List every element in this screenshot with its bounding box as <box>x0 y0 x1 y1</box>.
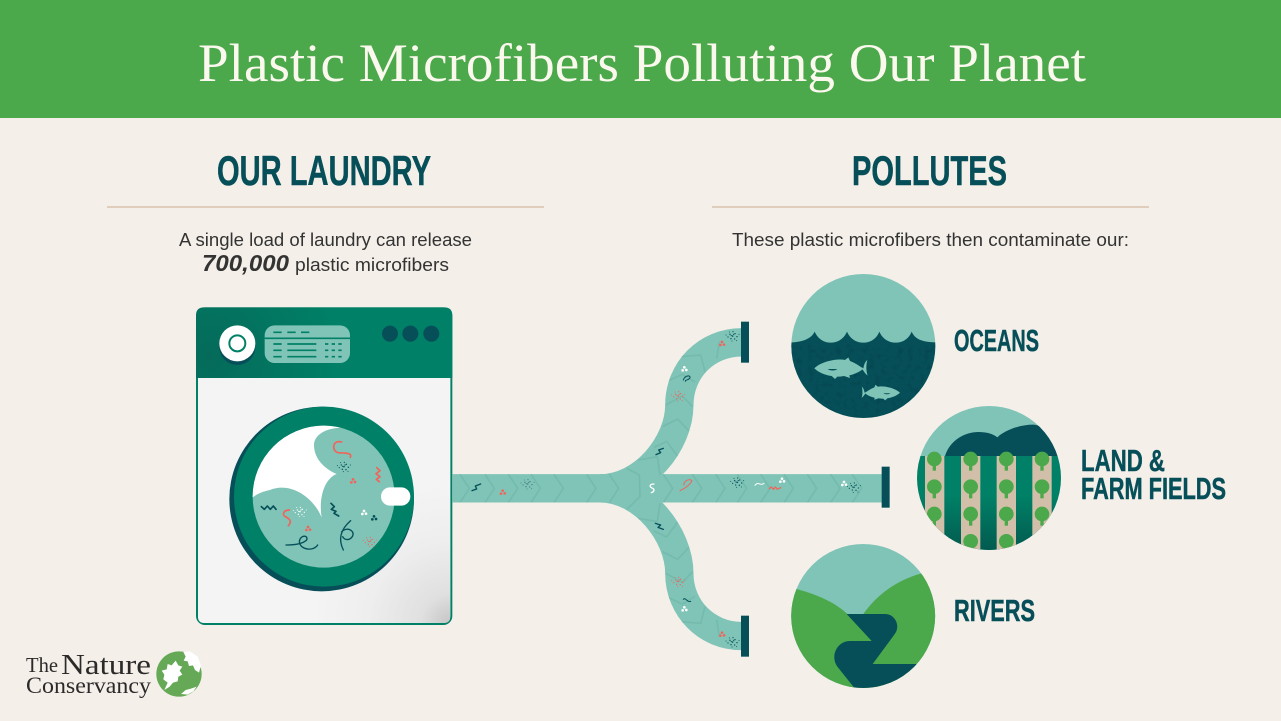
drum door <box>229 407 414 591</box>
label: oceans: OCEANS <box>954 323 1039 358</box>
chevrons <box>460 342 862 637</box>
pipe bodies <box>453 342 882 636</box>
label: land and farm fields: LAND & <box>1081 443 1165 478</box>
icon: land and farm fields <box>915 403 1065 553</box>
logo wordmark: The <box>26 653 58 677</box>
text: contaminate statement: These plastic microfibers then contaminate our: <box>732 230 1129 250</box>
label: land and farm fields <box>1081 443 1226 506</box>
trees <box>927 452 1049 549</box>
title: Plastic Microfibers Polluting Our Planet <box>198 33 1086 93</box>
text: laundry release statement: plastic microfibers <box>295 255 449 275</box>
logo: the nature conservancy <box>26 649 202 698</box>
washing machine <box>196 307 452 624</box>
logo wordmark: Conservancy <box>26 673 152 698</box>
logo leaf emblem <box>156 651 202 697</box>
control header <box>196 307 452 378</box>
text: laundry release statement: A single load of laundry can release <box>179 230 472 250</box>
display panel <box>265 325 350 363</box>
large fish <box>814 357 868 379</box>
title banner <box>0 0 1281 118</box>
machine body <box>197 308 451 624</box>
small fish <box>862 385 900 400</box>
light reflection <box>252 426 342 518</box>
microfiber particles <box>472 376 781 602</box>
heading: our laundry: OUR LAUNDRY <box>217 147 431 194</box>
buttons <box>382 326 439 342</box>
door handle <box>381 487 410 506</box>
end caps <box>741 322 890 657</box>
microfibers in drum <box>261 442 380 550</box>
logo wordmark <box>26 649 152 698</box>
text: laundry release statement <box>179 230 472 276</box>
dial <box>219 325 255 365</box>
label: rivers: RIVERS <box>954 593 1035 628</box>
logo wordmark: Nature <box>61 649 151 681</box>
text: laundry release statement: 700,000 <box>202 250 289 276</box>
icon: rivers <box>787 542 940 692</box>
pipes <box>453 322 890 657</box>
icon: oceans <box>791 274 936 418</box>
heading: pollutes: POLLUTES <box>852 147 1007 194</box>
